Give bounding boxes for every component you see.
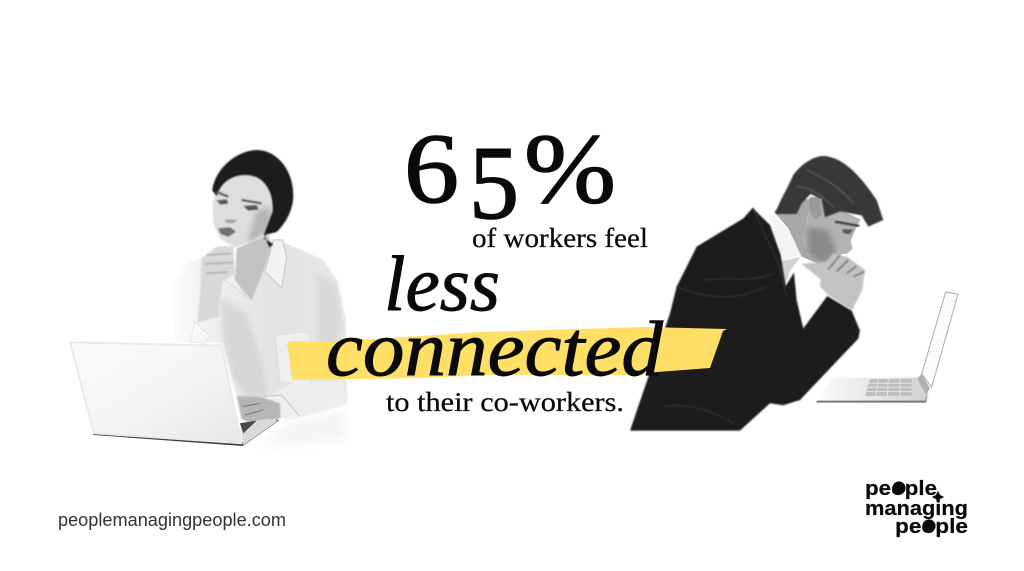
logo: people managing people: people	[895, 516, 968, 538]
man face	[802, 197, 861, 266]
logo: people managing people: managing	[865, 498, 968, 520]
woman laptop	[93, 419, 279, 446]
man laptop keyboard	[865, 379, 912, 396]
statistic: 65%: 5	[469, 124, 519, 241]
man suit	[630, 208, 860, 431]
woman neck	[235, 235, 272, 301]
logo: people managing people	[865, 478, 968, 538]
website url: peoplemanagingpeople.com	[58, 510, 286, 530]
logo: people managing people: people	[865, 478, 937, 500]
woman shirt	[172, 240, 347, 419]
man neck	[774, 198, 833, 266]
man clasped hands	[802, 253, 865, 311]
table shadow	[260, 410, 347, 447]
photo: man at laptop	[630, 156, 958, 431]
statistic: 65%: 6	[404, 113, 459, 224]
man laptop base	[817, 377, 928, 402]
woman hair	[212, 150, 293, 247]
text: of workers feel: of workers feel	[472, 223, 648, 253]
statistic: 65%	[404, 113, 616, 241]
man hair	[775, 156, 883, 227]
photo: woman at laptop	[70, 150, 347, 447]
woman face	[213, 173, 273, 247]
statistic: 65%: %	[524, 113, 616, 224]
text: connected: connected	[326, 305, 664, 392]
woman typing hand	[237, 396, 281, 424]
man laptop screen	[922, 292, 958, 387]
text: less: less	[384, 240, 500, 327]
woman hand at chin	[197, 246, 235, 323]
yellow brush highlight	[287, 327, 727, 380]
woman brows, eyes, nose and lips	[216, 192, 262, 237]
text: to their co-workers: to their co-workers.	[386, 387, 624, 417]
man shirt	[768, 212, 802, 286]
